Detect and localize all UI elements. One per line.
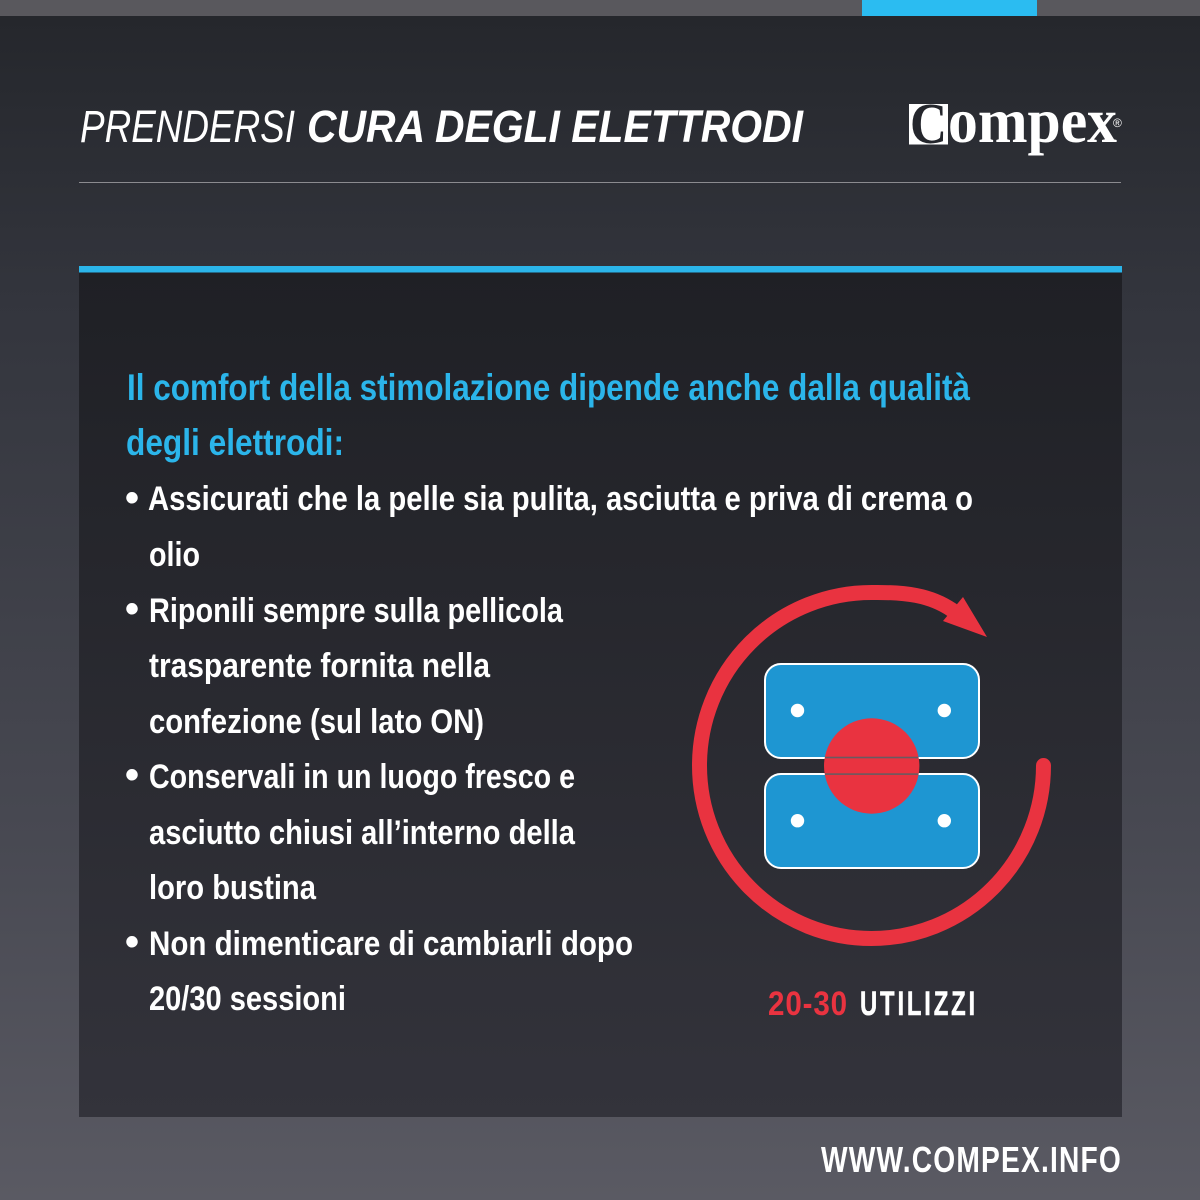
bullet list: •: [125, 587, 139, 631]
title: CURA DEGLI ELETTRODI: [307, 101, 804, 152]
bullet list: asciutto chiusi all’interno della: [149, 814, 576, 852]
usage label: UTILIZZI: [860, 985, 978, 1023]
bullet list: Non dimenticare di cambiarli dopo: [149, 925, 633, 963]
logo: Compex: ®: [1113, 116, 1122, 130]
bullet list: •: [125, 920, 139, 964]
website url: WWW.COMPEX.INFO: [821, 1139, 1122, 1180]
title: PRENDERSI: [80, 101, 295, 152]
logo: Compex: ompex: [948, 85, 1117, 156]
bullet list: •: [125, 476, 139, 520]
icon: electrodes with cycle arrow: [700, 592, 1044, 938]
panel: content: [79, 266, 1122, 1117]
bullet list: Assicurati che la pelle sia pulita, asciutta e priva di crema o: [148, 480, 973, 518]
bullet list: confezione (sul lato ON): [149, 703, 484, 741]
bullet list: Conservali in un luogo fresco e: [149, 758, 575, 796]
logo: Compex: C: [910, 91, 947, 156]
bullet list: 20/30 sessioni: [149, 980, 346, 1018]
bullet list: olio: [149, 536, 200, 574]
bullet list: loro bustina: [149, 869, 317, 907]
heading: [126, 367, 970, 463]
bullet list: trasparente fornita nella: [149, 647, 491, 685]
header divider: [79, 182, 1121, 183]
heading: Il comfort della stimolazione dipende anche dalla qualità: [127, 367, 970, 408]
electrode pads: [765, 664, 979, 868]
top bar: [0, 0, 1200, 16]
heading: degli elettrodi:: [126, 422, 344, 463]
bullet list: •: [125, 753, 139, 797]
cycle arrow: [700, 592, 1044, 938]
bullet list: [125, 476, 973, 1018]
bullet list: Riponili sempre sulla pellicola: [149, 592, 564, 630]
usage label: 20-30: [768, 985, 848, 1023]
red centre dot: [824, 718, 919, 814]
